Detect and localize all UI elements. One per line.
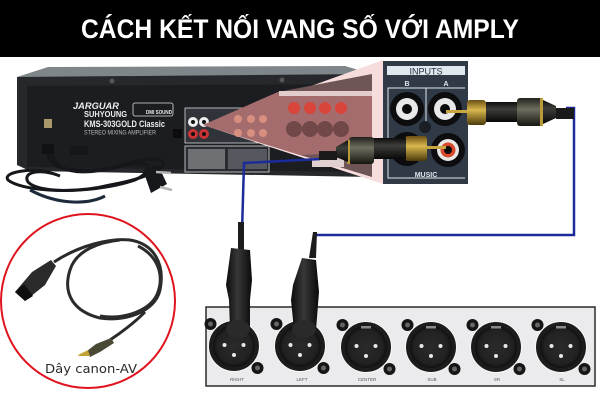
amplifier rear panel: STEREO MIXING AMPLIFIER — [84, 130, 157, 136]
inputs detail panel: B — [404, 81, 410, 88]
blue cable: left channel — [242, 159, 320, 232]
zoom beam — [203, 60, 383, 184]
XLR output rack panel: LEFT — [296, 377, 308, 382]
XLR output rack panel: RIGHT — [230, 377, 244, 382]
XLR output rack panel: CENTER — [358, 377, 377, 382]
amplifier rear panel: KMS-303GOLD Classic — [84, 119, 165, 130]
XLR output rack panel: SR — [494, 377, 501, 382]
XLR output rack panel: SL — [559, 377, 565, 382]
inputs detail panel: MUSIC — [415, 172, 437, 179]
title banner: CÁCH KẾT NỐI VANG SỐ VỚI AMPLY — [81, 12, 519, 44]
XLR output rack panel: SUB — [427, 377, 437, 382]
amplifier rear panel: JARGUAR — [73, 101, 119, 112]
cable coil — [54, 240, 161, 340]
amplifier rear panel: SUHYOUNG — [84, 110, 127, 119]
callout: canon-AV cable — [1, 214, 175, 388]
inputs detail panel: A — [443, 81, 449, 88]
amplifier rear panel: DMI SOUND — [146, 110, 172, 116]
RCA connector — [78, 338, 114, 357]
title banner — [0, 0, 600, 57]
RCA plug: lower — [319, 136, 446, 164]
power cord — [7, 144, 172, 202]
inputs detail panel: INPUTS — [409, 66, 443, 76]
blue cable: right channel — [316, 108, 574, 235]
XLR output rack panel — [204, 307, 595, 386]
amplifier rear panel — [17, 66, 372, 177]
inputs detail panel — [383, 61, 468, 184]
RCA plug: upper — [446, 98, 574, 126]
XLR plug: right — [226, 222, 252, 338]
XLR plug: left — [291, 232, 319, 338]
caption: Dây canon-AV — [45, 361, 137, 376]
XLR connector — [15, 260, 56, 301]
